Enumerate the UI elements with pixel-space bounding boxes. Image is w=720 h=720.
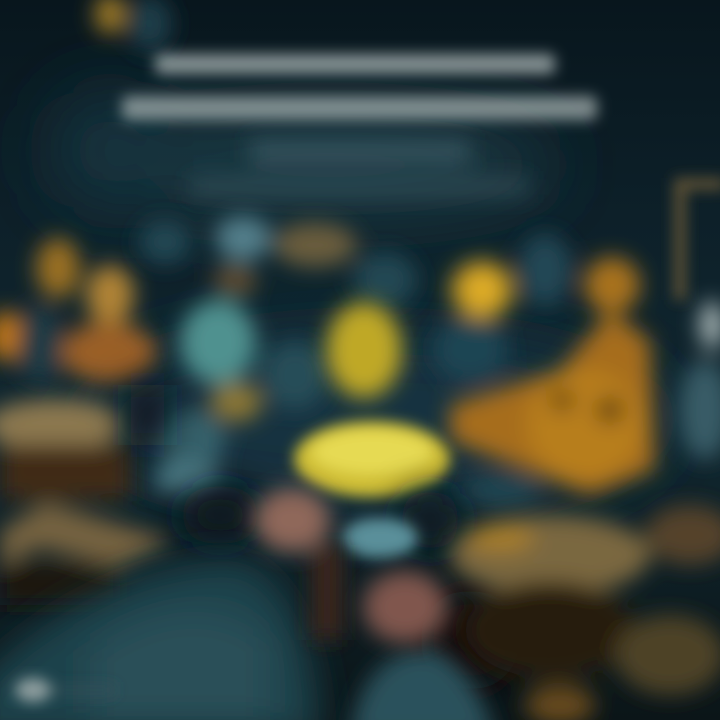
top-left orange blob	[95, 0, 172, 52]
yellow figure	[326, 302, 402, 398]
background glow	[50, 90, 660, 510]
foreground sleeve: left arm	[0, 560, 320, 720]
figures: right group	[432, 234, 720, 505]
hand: right	[363, 571, 447, 643]
bowls: left stack	[0, 399, 175, 605]
top-right frame shape	[680, 184, 720, 300]
bowls: right stack	[450, 505, 720, 720]
small teal cup	[342, 518, 418, 558]
bottom-left logo mark	[15, 678, 115, 702]
figures: left group	[0, 238, 156, 385]
yellow glowing disc	[294, 421, 450, 497]
hand: left	[254, 488, 342, 640]
subtitle: blurred text block	[190, 140, 530, 196]
foreground sleeve: right arm	[350, 650, 495, 720]
title: blurred headline	[122, 54, 597, 120]
dark foreground shadows	[130, 385, 520, 690]
figures: teal group	[139, 216, 417, 495]
